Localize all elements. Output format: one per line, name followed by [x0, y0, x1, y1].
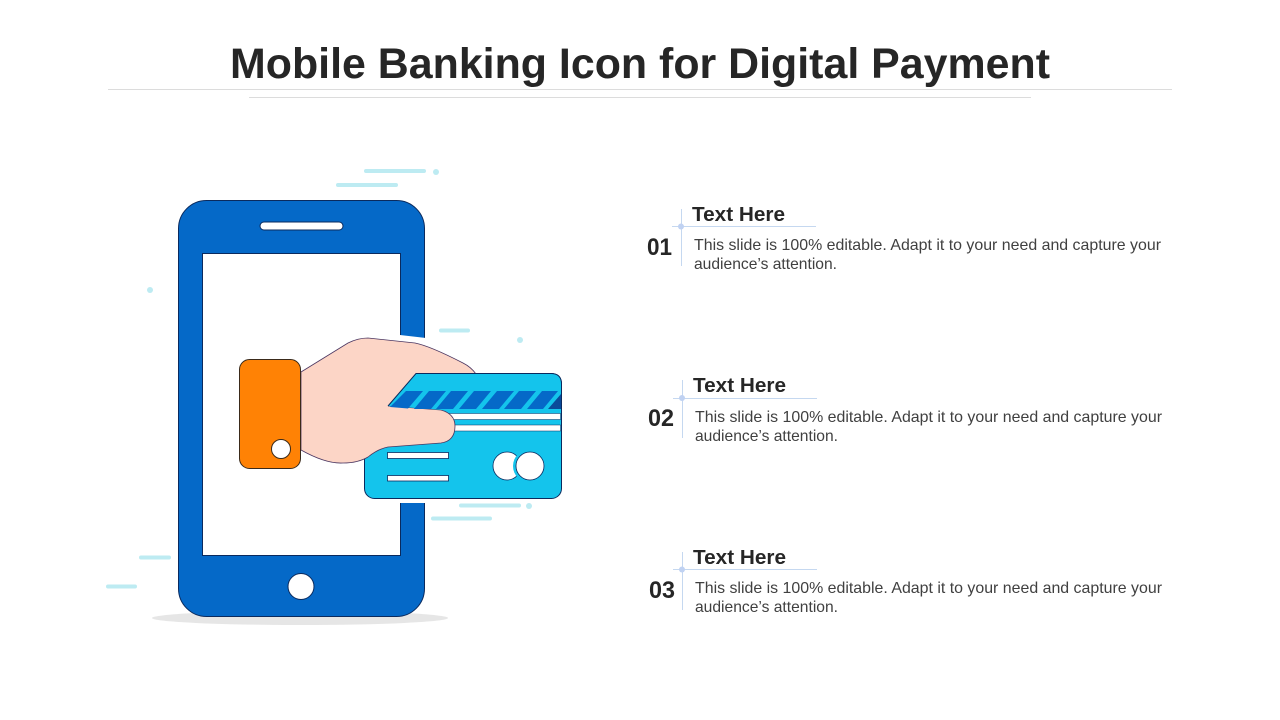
- hand: [301, 338, 476, 463]
- item 03: Text Here: [693, 546, 786, 569]
- item 02: [648, 374, 1163, 445]
- decorative motion lines and dots: [106, 169, 532, 588]
- item 03: audience’s attention.: [695, 599, 838, 616]
- card text lines: [388, 452, 448, 481]
- title: Mobile Banking Icon for Digital Payment: [230, 40, 1050, 88]
- card upper flap with stripes: [388, 374, 562, 411]
- item 03: This slide is 100% editable. Adapt it to your need and capture your: [695, 580, 1163, 597]
- item 01: Text Here: [692, 203, 785, 226]
- item 02: This slide is 100% editable. Adapt it to your need and capture your: [695, 409, 1163, 426]
- phone speaker: [260, 222, 343, 230]
- white cut-out around hand and card: [400, 335, 426, 503]
- phone body: [178, 200, 424, 616]
- credit card body: [364, 374, 562, 498]
- shirt cuff: [240, 360, 300, 468]
- phone home button: [288, 574, 314, 600]
- card logo circles: [493, 449, 547, 483]
- item 02: Text Here: [693, 374, 786, 397]
- card magnetic lines: [440, 414, 560, 431]
- phone screen: [202, 254, 400, 556]
- cuff button: [272, 440, 290, 458]
- item 01: This slide is 100% editable. Adapt it to your need and capture your: [694, 237, 1162, 254]
- illustration: phone with hand and card: [106, 169, 562, 625]
- item 01: audience’s attention.: [694, 256, 837, 273]
- item 02: audience’s attention.: [695, 428, 838, 445]
- phone shadow: [152, 611, 448, 625]
- item 03: [649, 546, 1163, 616]
- item 01: [647, 203, 1162, 273]
- item 01: 01: [647, 234, 672, 261]
- item 03: 03: [649, 577, 675, 604]
- item 02: 02: [648, 405, 674, 432]
